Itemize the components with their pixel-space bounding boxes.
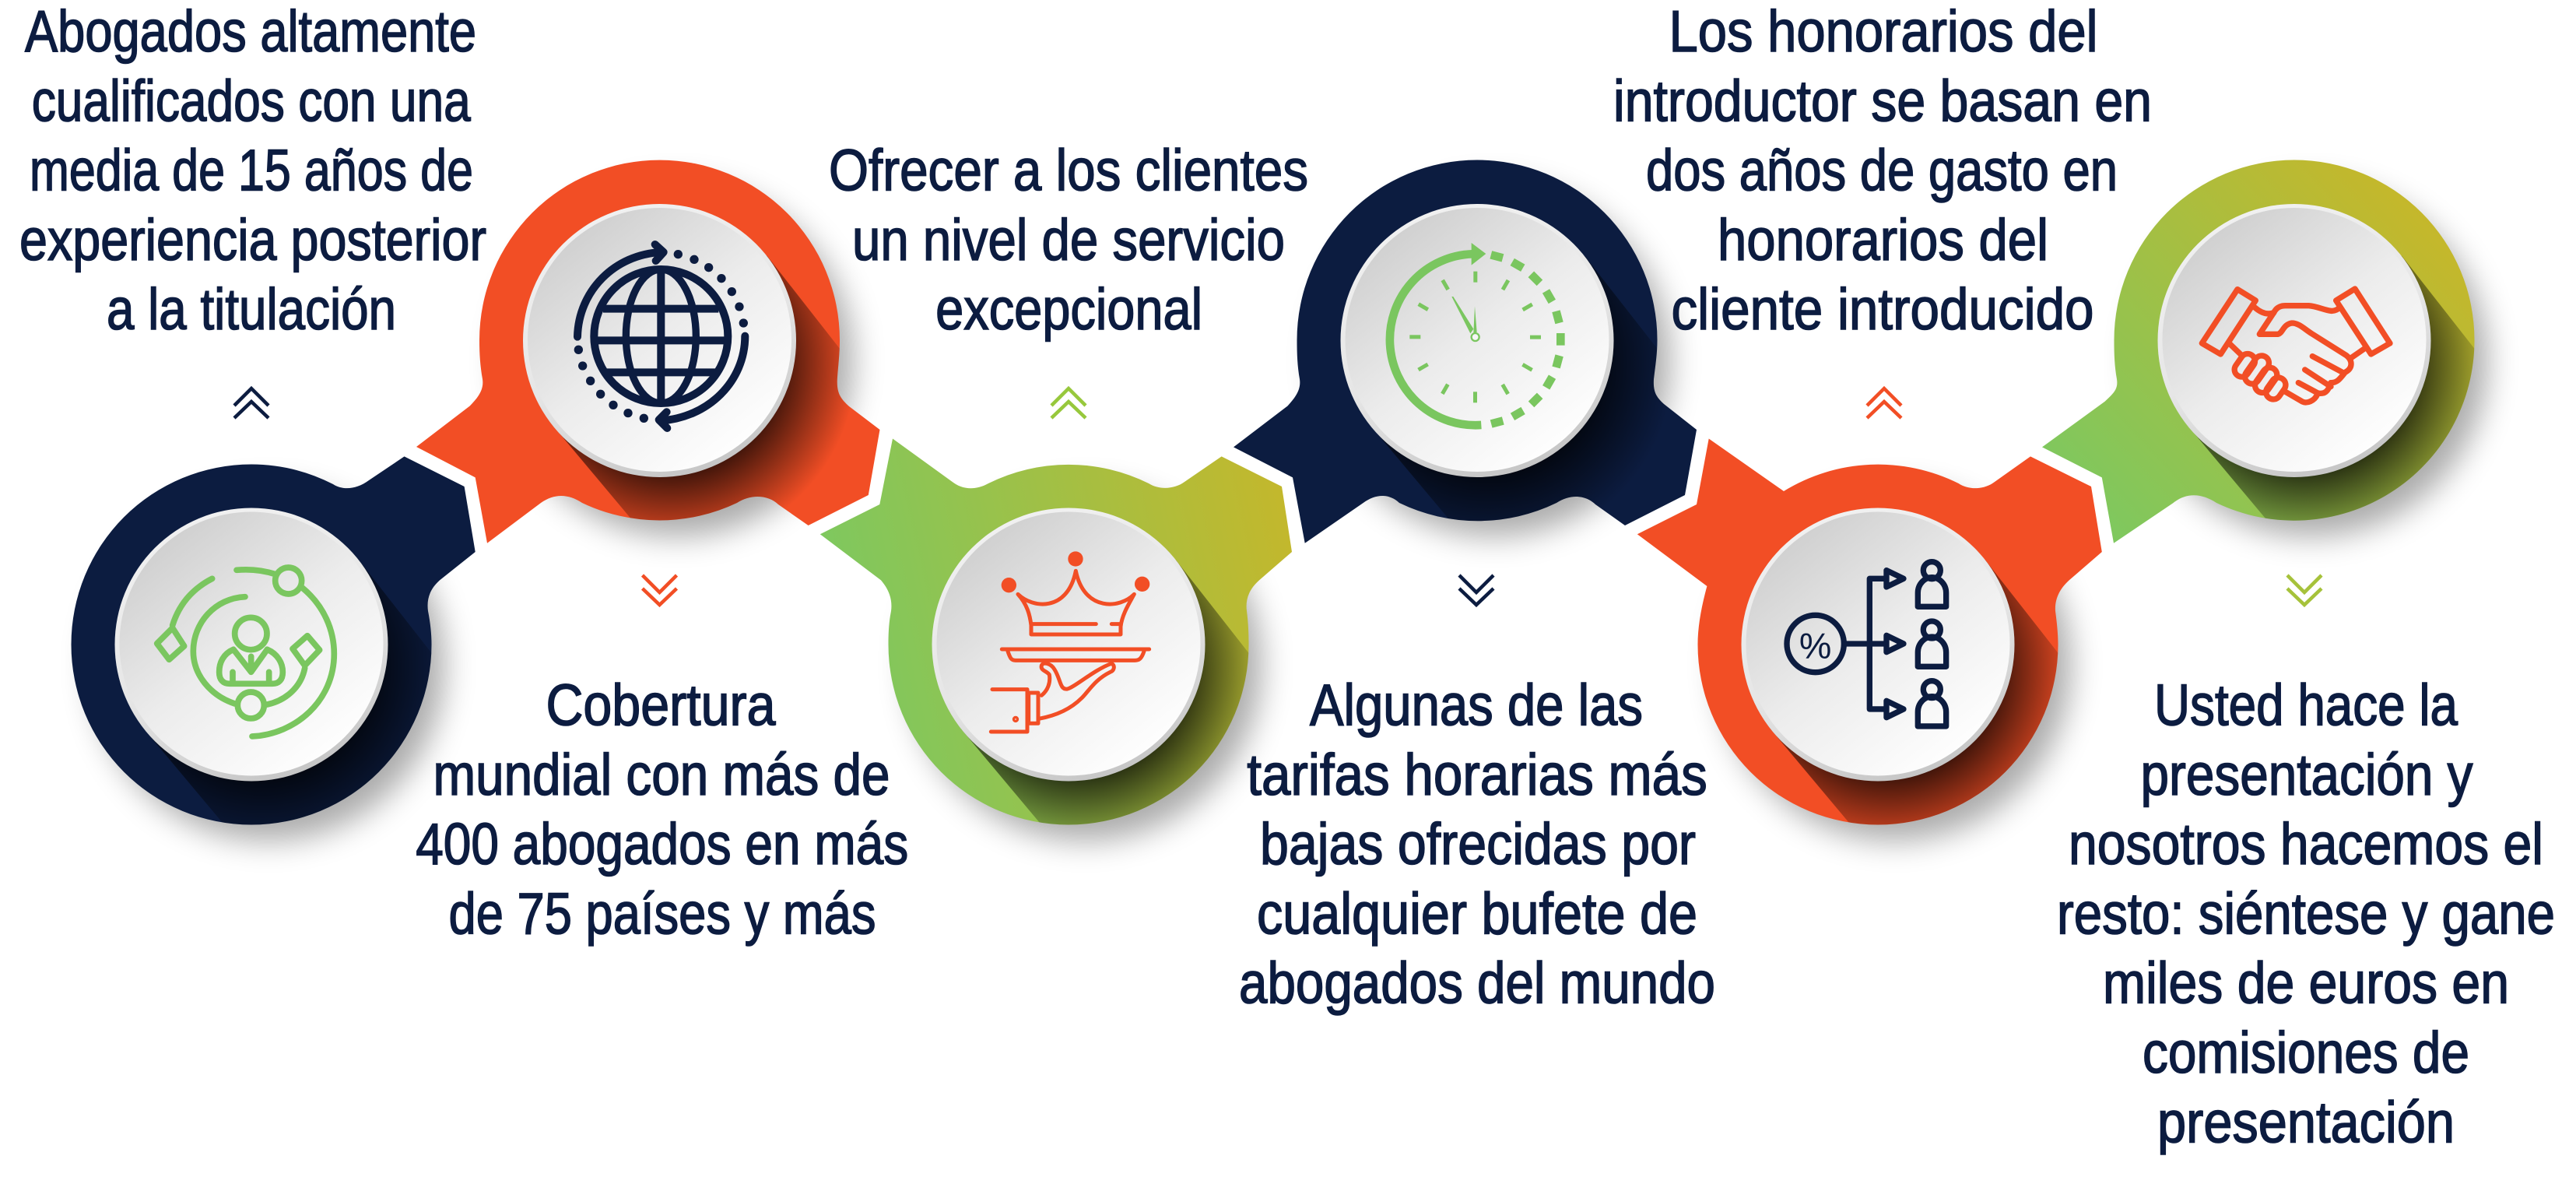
text block: step 1: cualificados con una [32, 68, 471, 133]
panel: step 2 orange circle [416, 160, 879, 543]
text block: step 4: abogados del mundo [1239, 950, 1715, 1016]
text block: step 6: presentación [2157, 1089, 2455, 1154]
text block: step 5: introductor se basan en [1613, 68, 2152, 133]
text block: step 1: media de 15 años de [30, 138, 473, 203]
text block: step 3: excepcional [935, 276, 1202, 342]
text block: step 2 [416, 673, 908, 946]
icon: crown on a serving tray [991, 551, 1149, 732]
text block: step 5: honorarios del [1718, 207, 2048, 272]
text block: step 4: Algunas de las [1310, 673, 1643, 738]
text block: step 6: comisiones de [2143, 1020, 2469, 1085]
text block: step 4 [1239, 673, 1715, 1016]
panel: step 4 navy circle [1234, 160, 1697, 543]
text block: step 5 [1613, 0, 2152, 342]
icon: globe with circular arrows [574, 244, 748, 428]
panel: step 1 navy circle [72, 456, 476, 825]
icon: percentage split to three people [1787, 562, 1946, 726]
text block: step 1: a la titulación [107, 276, 396, 342]
chevrons: step 3 up [1051, 388, 1086, 418]
chevrons: step 1 up [234, 388, 268, 418]
text block: step 6: presentación y [2140, 742, 2473, 807]
text block: step 2: de 75 países y más [448, 880, 876, 946]
chevrons: step 2 down [643, 575, 677, 605]
text block: step 6 [2057, 673, 2555, 1154]
text block: step 4: cualquier bufete de [1257, 880, 1697, 946]
text block: step 4: tarifas horarias más [1247, 742, 1707, 807]
text block: step 5: cliente introducido [1672, 276, 2093, 342]
icon: clock with circular arrow [1390, 243, 1565, 428]
chevrons: step 5 up [1867, 388, 1901, 418]
chevrons: step 6 down [2287, 575, 2322, 605]
text block: step 3 [829, 138, 1308, 342]
text block: step 6: Usted hace la [2154, 673, 2458, 738]
icon: person with orbit arrows [157, 567, 334, 736]
text block: step 1 [19, 0, 486, 342]
text block: step 6: miles de euros en [2103, 950, 2509, 1016]
text block: step 3: un nivel de servicio [852, 207, 1285, 272]
icon: handshake [2202, 289, 2390, 402]
text block: step 2: Cobertura [546, 673, 776, 738]
text block: step 4: bajas ofrecidas por [1260, 811, 1696, 877]
panel: step 6 green circle [2042, 160, 2475, 543]
text block: step 1: Abogados altamente [25, 0, 476, 64]
icon: percentage split to three people: % [1799, 626, 1831, 666]
text block: step 1: experiencia posterior [19, 207, 486, 272]
text block: step 2: mundial con más de [433, 742, 890, 807]
text block: step 5: dos años de gasto en [1646, 138, 2118, 203]
drop shadows beneath the step shapes [93, 184, 2487, 841]
text block: step 5: Los honorarios del [1669, 0, 2098, 64]
panel: step 5 orange circle [1637, 439, 2102, 825]
text block: step 3: Ofrecer a los clientes [829, 138, 1308, 203]
chevrons: step 4 down [1459, 575, 1493, 605]
text block: step 2: 400 abogados en más [416, 811, 908, 877]
panel: step 3 green circle [820, 439, 1292, 825]
